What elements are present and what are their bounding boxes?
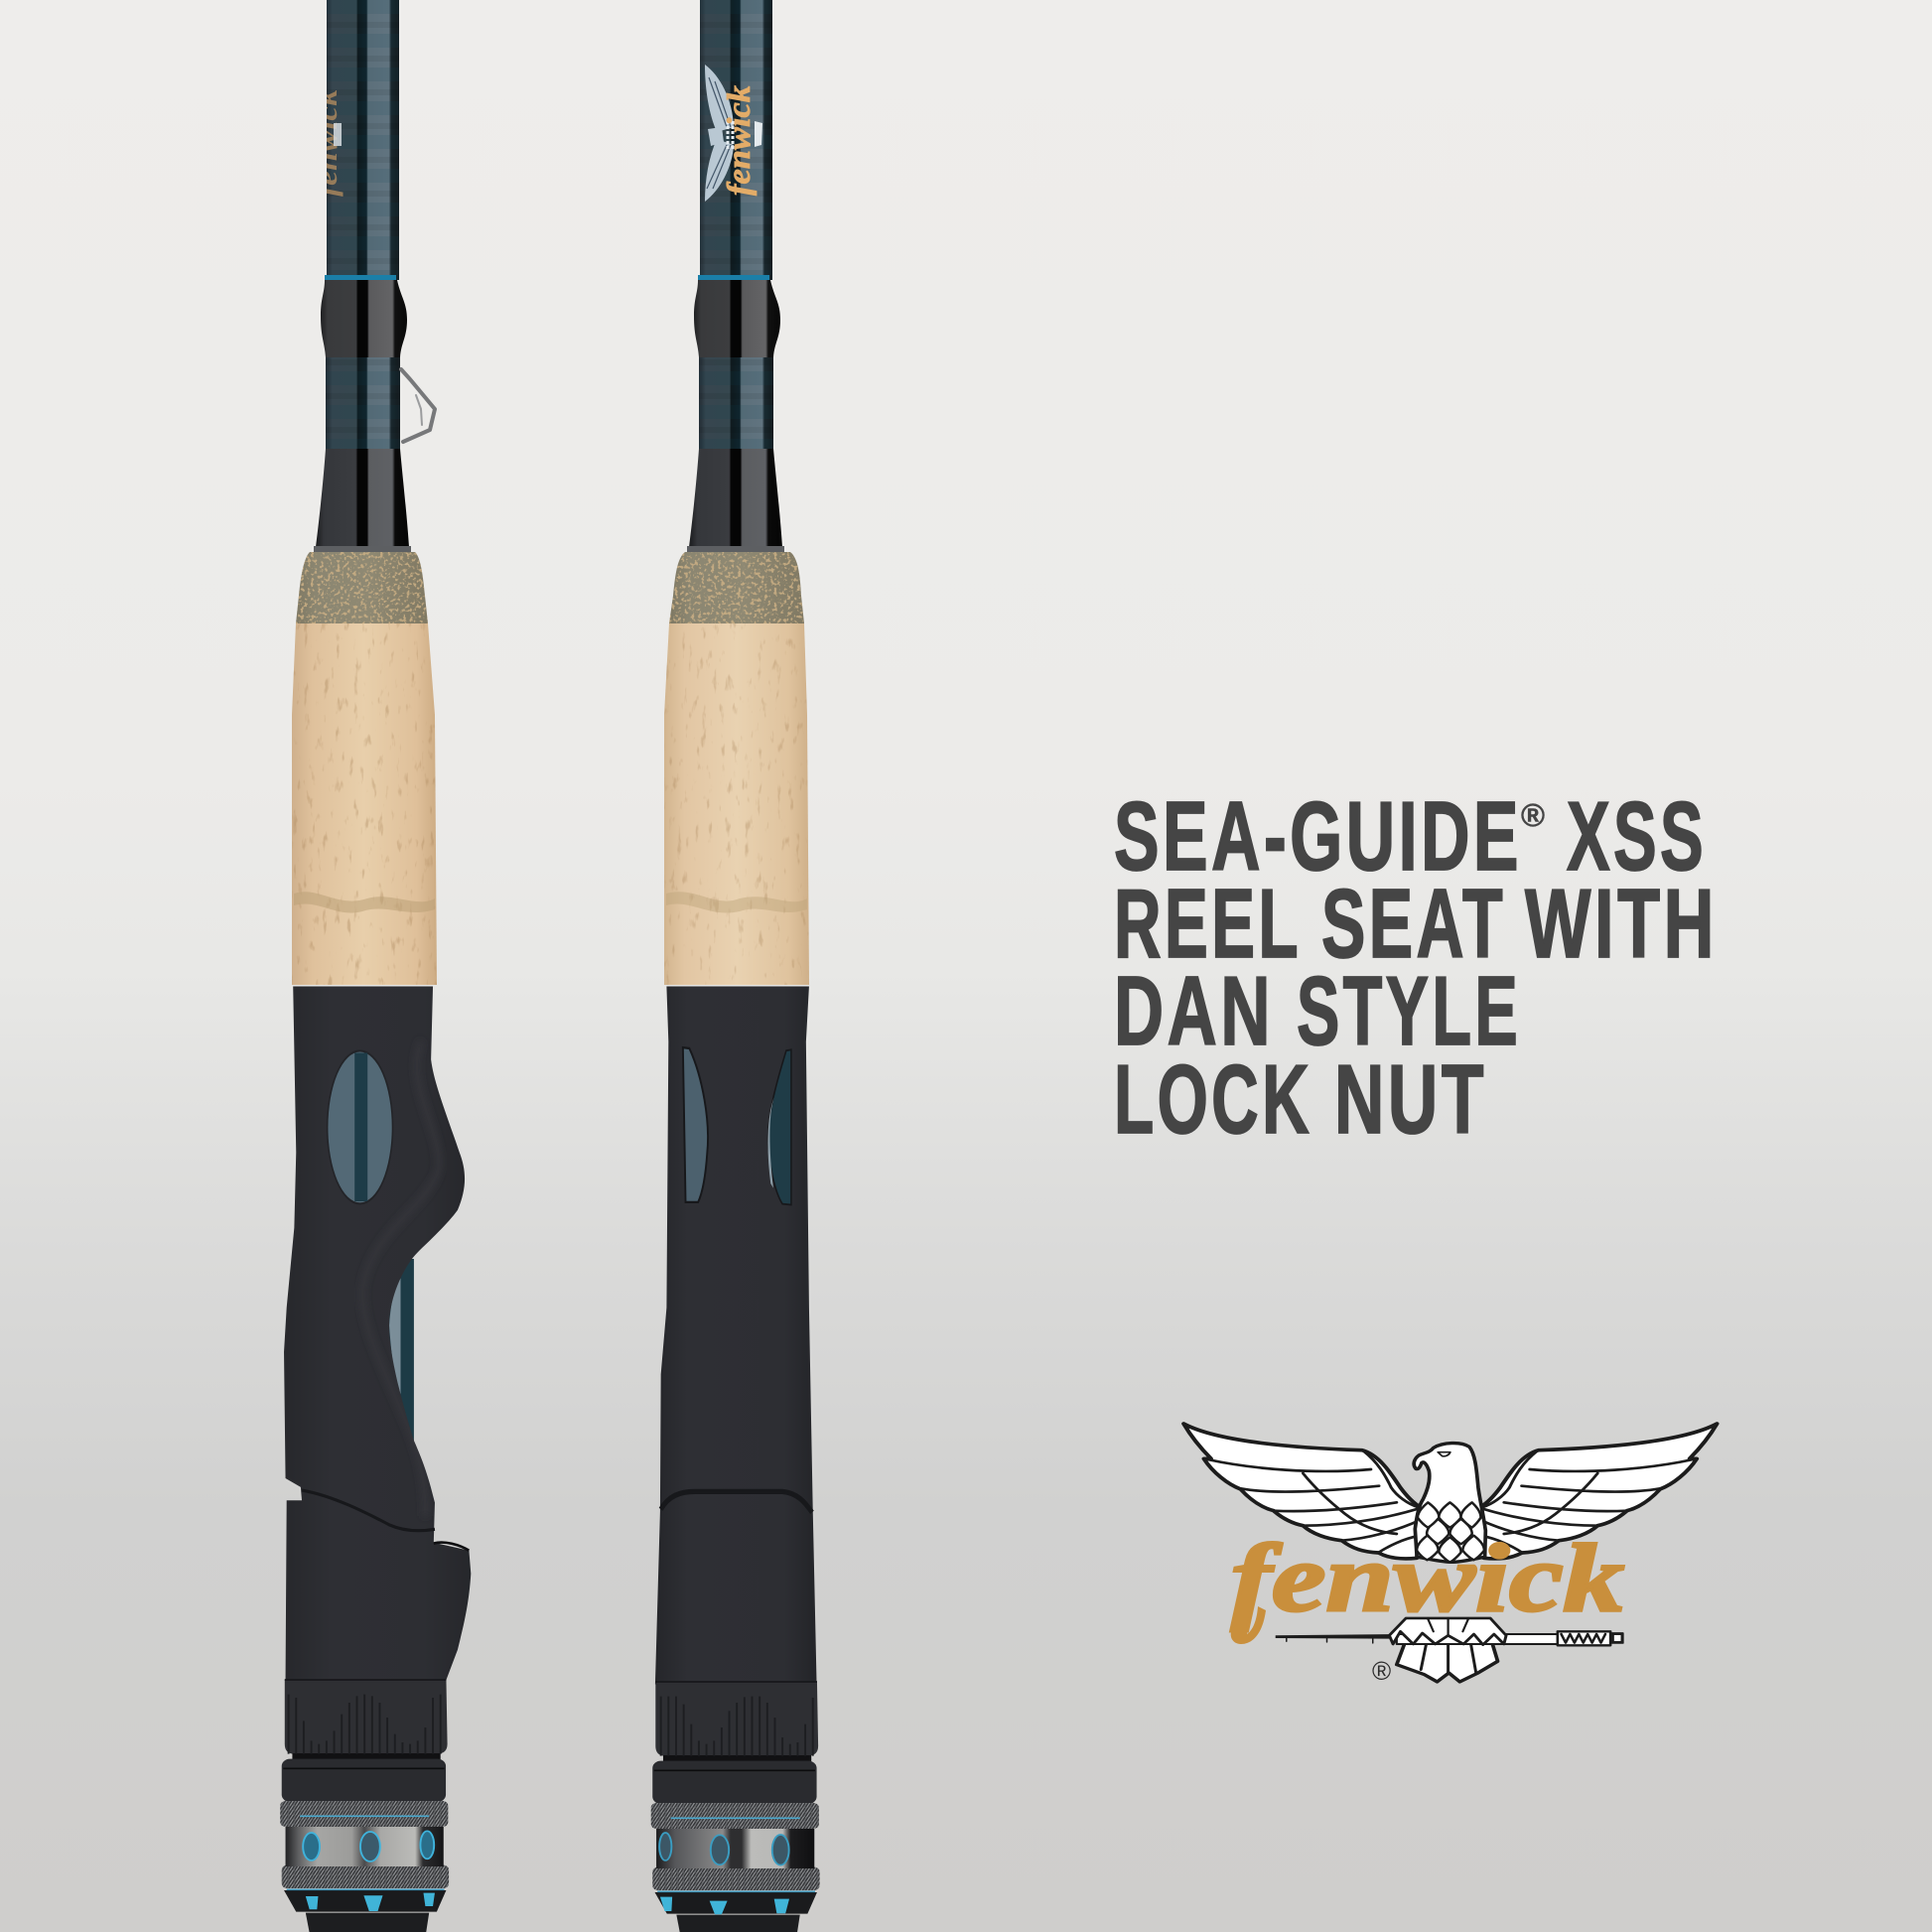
ribbed collar — [289, 1695, 441, 1754]
faint fenwick logo on left rod: fenwick — [311, 89, 344, 197]
rod logo: eagle wings and fenwick: fenwick — [722, 84, 758, 196]
registered mark: ® — [1372, 1656, 1391, 1686]
heading: reel seat description: SEAT — [1321, 869, 1506, 978]
grip joint line — [661, 1491, 812, 1512]
left wing — [1183, 1424, 1421, 1559]
faint fenwick logo on left rod — [327, 90, 344, 197]
talons — [1389, 1618, 1506, 1645]
grip joint line — [302, 1490, 435, 1531]
ridge shading — [414, 1442, 428, 1477]
eye — [1438, 1452, 1450, 1456]
left window — [683, 1047, 708, 1202]
heading: reel seat description: LOCK — [1114, 1044, 1312, 1154]
heading: reel seat description: NUT — [1334, 1044, 1487, 1154]
heading: reel seat description: XSS — [1567, 781, 1707, 891]
cork fore grip, right rod — [664, 552, 809, 985]
panel: right fishing rod (front view) — [651, 0, 820, 1932]
rod blank and ferrule, upper right rod — [687, 0, 784, 552]
reel seat lower assembly, right rod — [651, 1682, 820, 1932]
right wing — [1480, 1424, 1717, 1559]
rod blank and ferrule, upper left rod — [314, 0, 411, 552]
silver band with cyan ports — [656, 1829, 814, 1868]
cyan lower ports — [660, 1897, 789, 1914]
panel: left fishing rod (casting view) — [280, 0, 471, 1932]
heading: reel seat description: ® — [1521, 797, 1545, 833]
heading: reel seat description: DAN — [1114, 956, 1274, 1065]
heading: reel seat description: STYLE — [1297, 956, 1521, 1065]
fenwick wordmark: fenwick — [1231, 1525, 1624, 1632]
grip body — [284, 986, 471, 1680]
heading: reel seat description: SEA-GUIDE — [1114, 781, 1522, 891]
line guide on left rod — [401, 369, 435, 442]
reel seat lower assembly, left rod — [280, 1680, 449, 1932]
blank visible through windows — [389, 1259, 414, 1446]
ribbed collar — [661, 1697, 813, 1756]
logo: fenwick eagle — [1183, 1424, 1717, 1686]
right window — [768, 1049, 791, 1205]
rod logo: eagle wings and fenwick — [705, 65, 762, 202]
reel seat grip, right rod — [655, 986, 817, 1685]
cyan lower ports — [306, 1893, 435, 1911]
eagle drawing — [1183, 1424, 1717, 1682]
reel seat grip, left rod — [284, 986, 471, 1680]
blank window oval — [327, 1049, 393, 1205]
tail — [1397, 1643, 1498, 1682]
heading: reel seat description — [1114, 781, 1718, 1154]
fishing rod — [1276, 1631, 1623, 1645]
eagle head and body — [1414, 1444, 1485, 1562]
chest feathers — [1417, 1502, 1484, 1563]
silver band with cyan ports — [286, 1827, 444, 1866]
heading: reel seat description: REEL — [1114, 869, 1302, 978]
cork fore grip, left rod — [292, 552, 437, 985]
heading: reel seat description: WITH — [1525, 869, 1718, 978]
